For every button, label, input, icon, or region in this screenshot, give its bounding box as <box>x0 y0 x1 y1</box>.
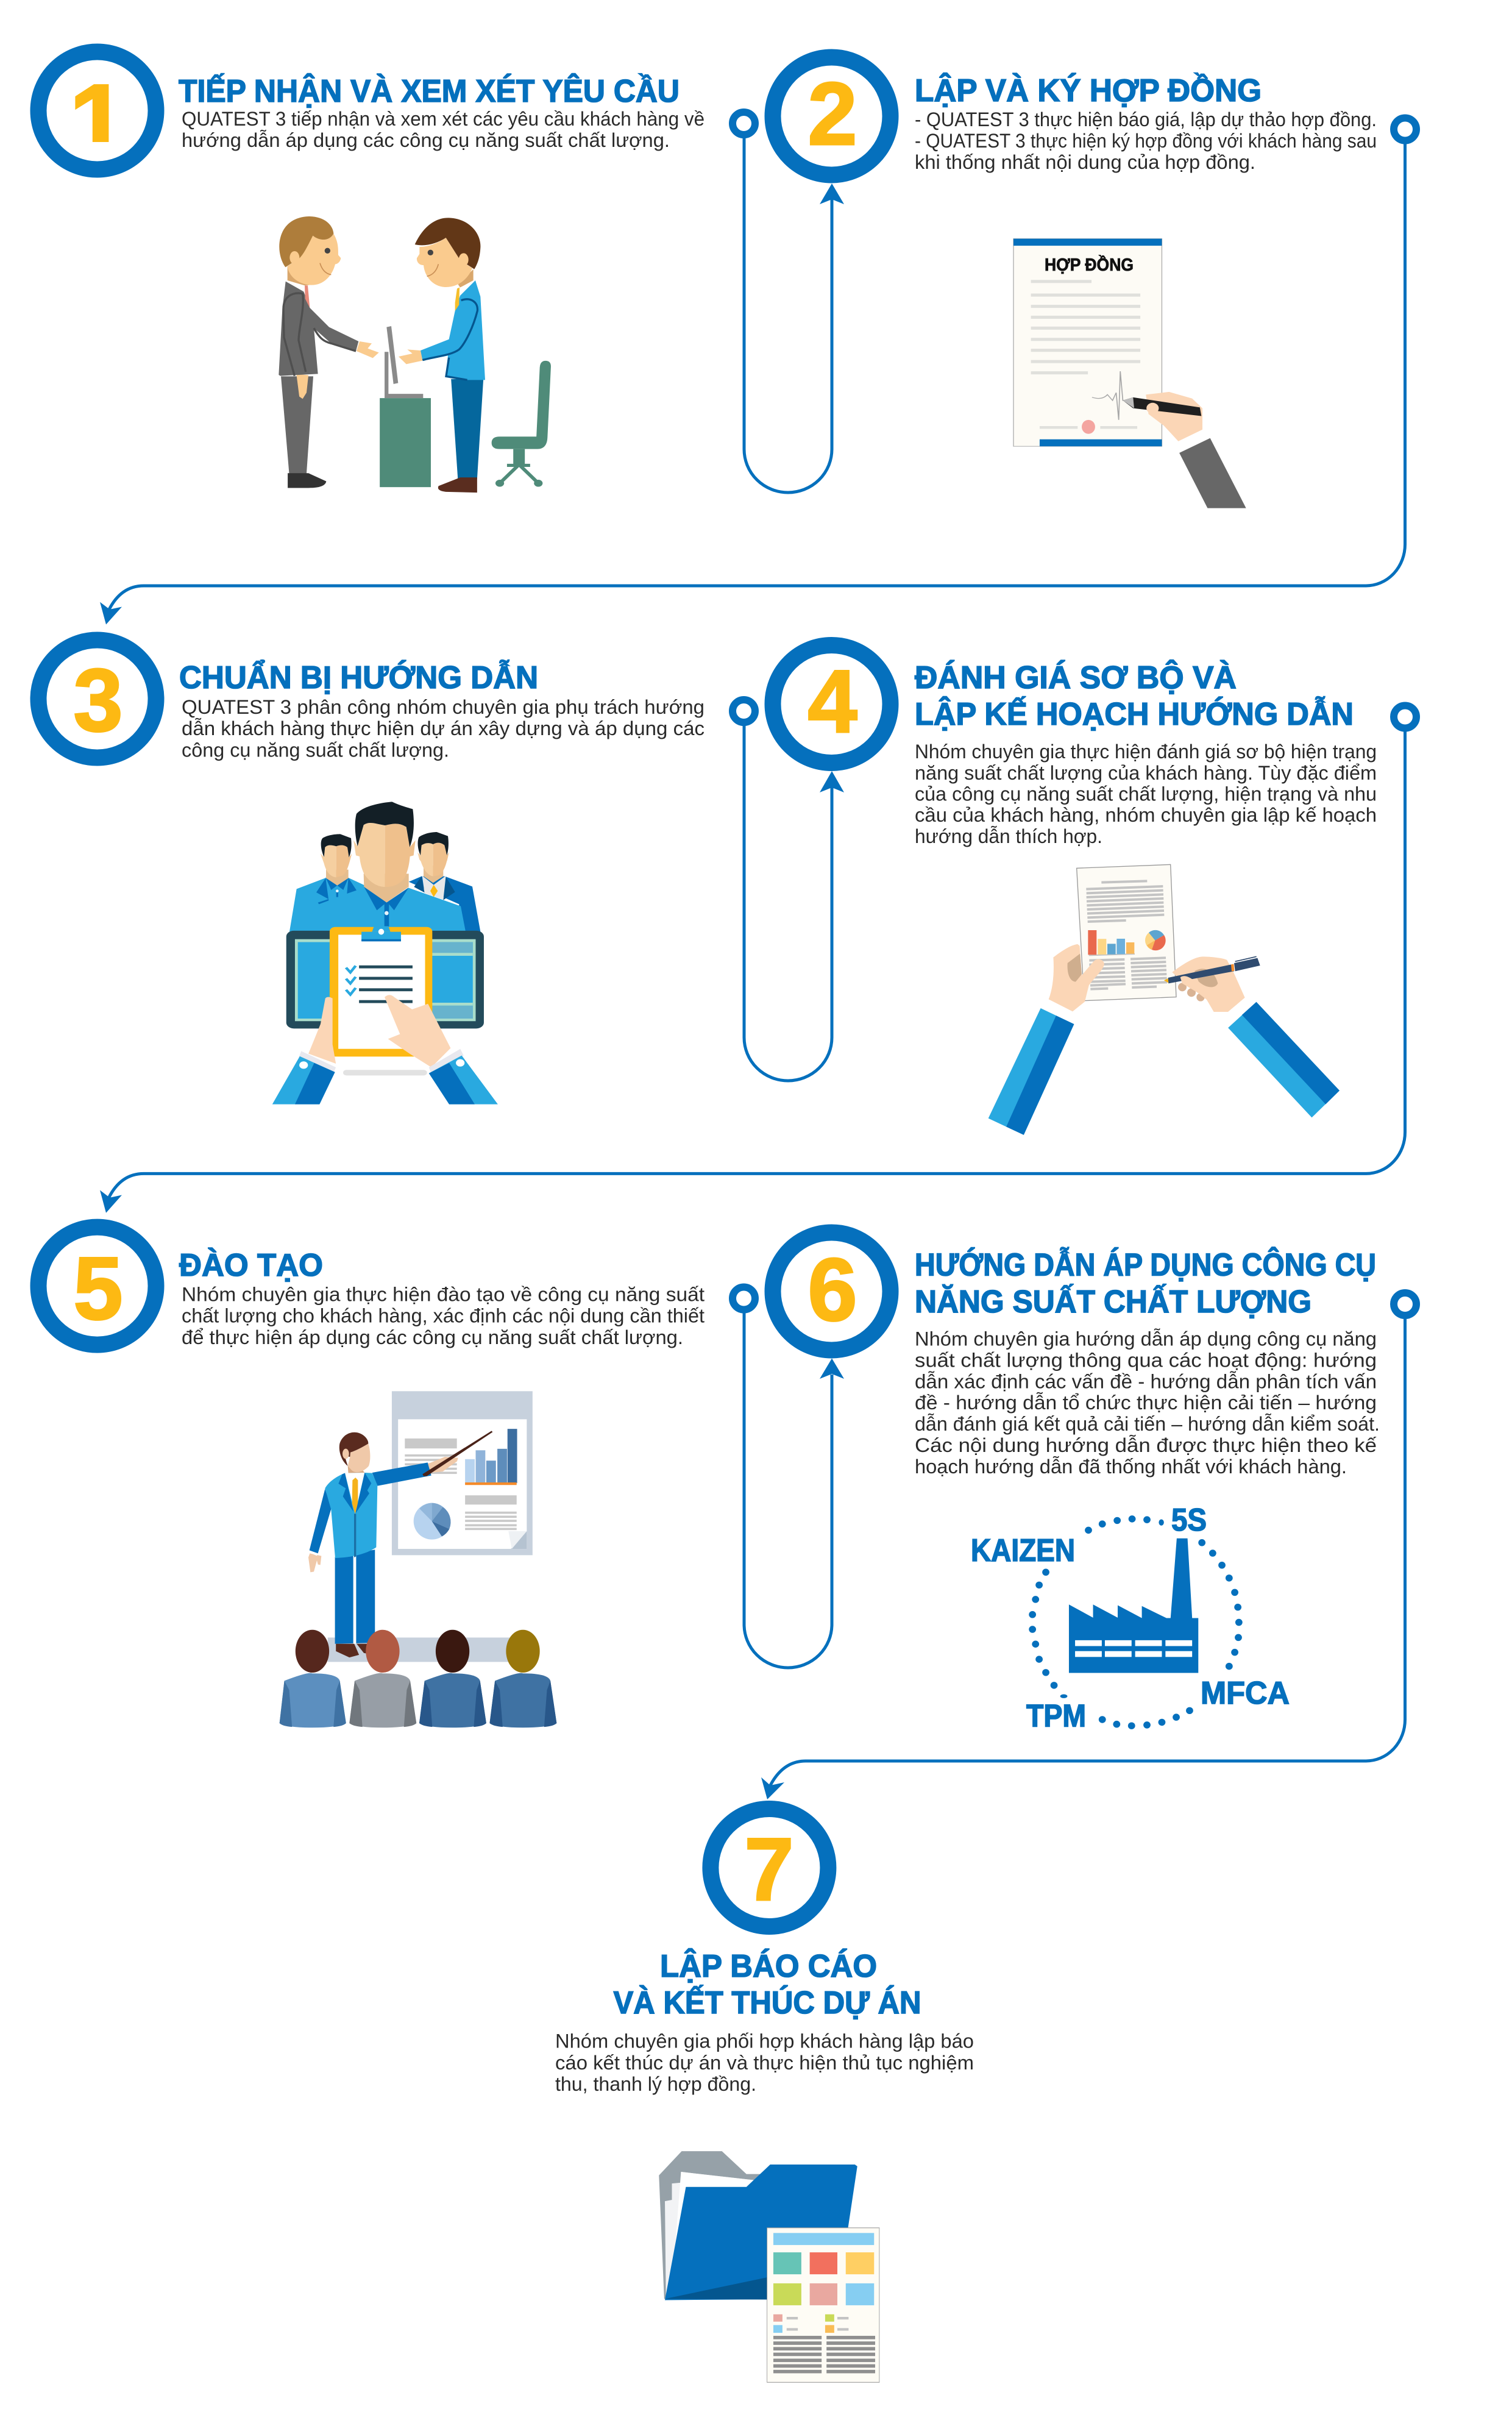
number badge 2 <box>773 57 890 175</box>
number badge 4: 4 <box>807 652 857 751</box>
panel: step 4 <box>773 645 1377 1135</box>
text block: step 3 <box>182 696 705 761</box>
number badge 1: 1 <box>69 63 127 180</box>
text block: step 7: Nhóm chuyên gia phối hợp khách hàng lập báo <box>555 2030 974 2052</box>
text block: step 4: năng suất chất lượng của khách hàng. Tùy đặc điểm <box>915 762 1377 784</box>
number badge 7: 7 <box>744 1820 794 1919</box>
illustration: presenter training an audience <box>280 1391 556 1727</box>
number badge 6: 6 <box>807 1240 857 1339</box>
heading: step 6: HƯỚNG DẪN ÁP DỤNG CÔNG CỤ <box>915 1247 1376 1283</box>
text block: step 6: đề - hướng dẫn tổ chức thực hiện cải tiến – hướng <box>915 1392 1377 1414</box>
heading: step 7: LẬP BÁO CÁO <box>660 1948 877 1984</box>
heading: step 7 <box>613 1948 921 2021</box>
text block: step 7 <box>555 2030 974 2095</box>
arrow: step 5 to step 6 connector <box>733 1287 844 1668</box>
number badge 5: 5 <box>73 1239 123 1338</box>
text block: step 4: của công cụ năng suất chất lượng, hiện trạng và nhu <box>915 783 1377 805</box>
number badge 2: 2 <box>807 64 857 163</box>
panel: step 1 <box>38 52 705 493</box>
heading: step 4: ĐÁNH GIÁ SƠ BỘ VÀ <box>915 660 1237 695</box>
panel: step 3 <box>38 640 705 1105</box>
heading: step 6: NĂNG SUẤT CHẤT LƯỢNG <box>915 1284 1311 1320</box>
text block: step 3: QUATEST 3 phân công nhóm chuyên gia phụ trách hướng <box>182 696 705 718</box>
text block: step 6: Nhóm chuyên gia hướng dẫn áp dụng công cụ năng <box>915 1328 1377 1350</box>
heading: step 5: ĐÀO TẠO <box>179 1248 323 1283</box>
text block: step 2: khi thống nhất nội dung của hợp đồng. <box>915 151 1255 173</box>
number badge 7 <box>711 1809 828 1926</box>
text block: step 2: - QUATEST 3 thực hiện báo giá, lập dự thảo hợp đồng. <box>915 109 1377 130</box>
heading: step 4: LẬP KẾ HOẠCH HƯỚNG DẪN <box>915 696 1354 732</box>
label: contract title: HỢP ĐỒNG <box>1045 254 1134 275</box>
text block: step 2: - QUATEST 3 thực hiện ký hợp đồng với khách hàng sau <box>915 130 1377 152</box>
panel: step 5 <box>38 1227 705 1727</box>
text block: step 5: chất lượng cho khách hàng, xác định các nội dung cần thiết <box>182 1305 705 1327</box>
arrow: step 3 to step 4 connector <box>733 700 844 1081</box>
illustration: two men shaking hands at a desk <box>279 216 551 493</box>
number badge 3: 3 <box>73 650 123 750</box>
number badge 5 <box>38 1227 156 1345</box>
illustration: signing a contract <box>1013 239 1246 508</box>
number badge 6 <box>773 1233 890 1350</box>
number badge 1 <box>38 52 156 180</box>
text block: step 3: dẫn khách hàng thực hiện dự án xây dựng và áp dụng các <box>182 717 705 739</box>
heading: step 3: CHUẨN BỊ HƯỚNG DẪN <box>179 660 538 695</box>
number badge 3 <box>38 640 156 758</box>
text block: step 6: Các nội dung hướng dẫn được thực hiện theo kế <box>915 1434 1377 1456</box>
label: TPM: TPM <box>1026 1698 1086 1734</box>
heading: step 4 <box>915 660 1354 732</box>
label: 5S: 5S <box>1171 1503 1207 1538</box>
text block: step 6 <box>915 1328 1380 1478</box>
text block: step 1: QUATEST 3 tiếp nhận và xem xét các yêu cầu khách hàng về <box>182 108 705 130</box>
text block: step 3: công cụ năng suất chất lượng. <box>182 739 449 761</box>
text block: step 1 <box>182 108 705 151</box>
text block: step 6: dẫn xác định các vấn đề - hướng dẫn phân tích vấn <box>915 1371 1377 1393</box>
icon: factory and dotted ring <box>1029 1515 1243 1729</box>
illustration: hands reviewing a report <box>988 864 1340 1135</box>
text block: step 4: cầu của khách hàng, nhóm chuyên gia lập kế hoạch <box>915 804 1377 826</box>
text block: step 2 <box>915 109 1377 173</box>
text block: step 1: hướng dẫn áp dụng các công cụ năng suất chất lượng. <box>182 129 670 151</box>
arrow: step 1 to step 2 connector <box>733 112 844 493</box>
label: MFCA: MFCA <box>1201 1676 1290 1711</box>
illustration: expert team with clipboard <box>272 802 498 1105</box>
text block: step 7: thu, thanh lý hợp đồng. <box>555 2073 756 2095</box>
text block: step 4: hướng dẫn thích hợp. <box>915 825 1102 847</box>
panel: step 2 <box>773 57 1377 508</box>
arrow: step 6 to step 7 connector <box>761 1293 1416 1799</box>
text block: step 6: suất chất lượng thông qua các hoạt động: hướng <box>915 1350 1377 1371</box>
arrow: step 4 to step 5 connector <box>100 706 1416 1213</box>
heading: step 7: VÀ KẾT THÚC DỰ ÁN <box>613 1985 921 2021</box>
text block: step 7: cáo kết thúc dự án và thực hiện thủ tục nghiệm <box>555 2052 974 2074</box>
diagram: factory with quality tools <box>971 1503 1290 1734</box>
heading: step 1: TIẾP NHẬN VÀ XEM XÉT YÊU CẦU <box>179 73 680 109</box>
heading: step 6 <box>915 1247 1376 1320</box>
text block: step 5: Nhóm chuyên gia thực hiện đào tạo về công cụ năng suất <box>182 1284 705 1306</box>
heading: step 2: LẬP VÀ KÝ HỢP ĐỒNG <box>915 73 1262 109</box>
text block: step 4: Nhóm chuyên gia thực hiện đánh giá sơ bộ hiện trạng <box>915 741 1377 763</box>
text block: step 6: dẫn đánh giá kết quả cải tiến – hướng dẫn kiểm soát. <box>915 1413 1380 1435</box>
panel: step 6 <box>773 1233 1380 1734</box>
text block: step 5 <box>182 1284 705 1348</box>
illustration: folder and report <box>659 2151 879 2382</box>
panel: step 7 <box>555 1809 974 2382</box>
number badge 4 <box>773 645 890 763</box>
label: KAIZEN: KAIZEN <box>971 1533 1075 1568</box>
arrow: step 2 to step 3 connector <box>100 118 1416 624</box>
text block: step 4 <box>915 741 1377 847</box>
text block: step 5: để thực hiện áp dụng các công cụ năng suất chất lượng. <box>182 1326 683 1348</box>
text block: step 6: hoạch hướng dẫn đã thống nhất với khách hàng. <box>915 1456 1347 1478</box>
